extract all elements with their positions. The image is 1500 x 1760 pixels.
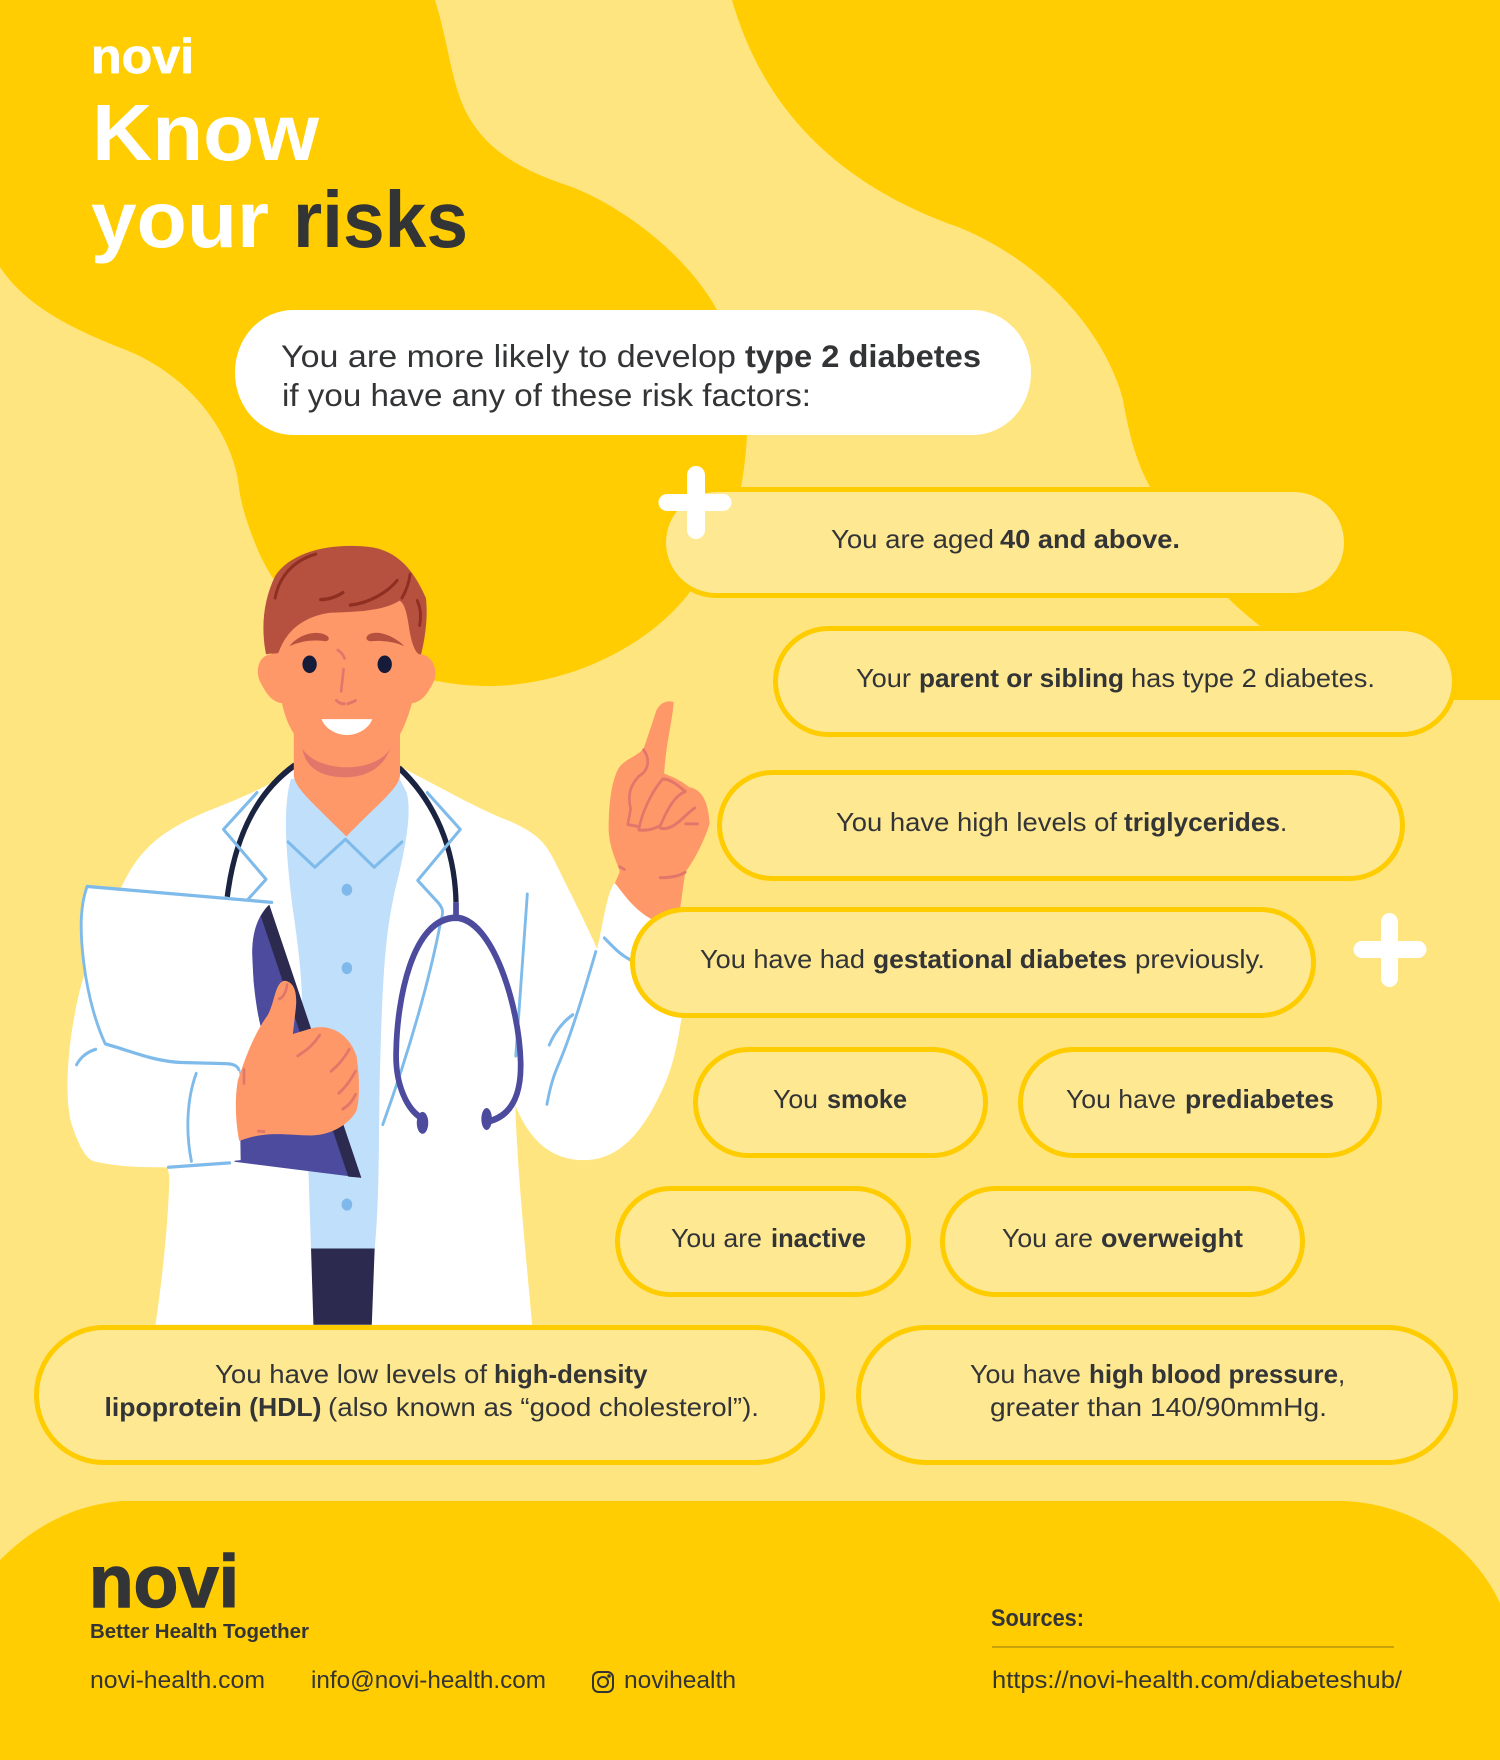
clipboard folder <box>81 886 361 1178</box>
risk pill: HDL: (also known as “good cholesterol”). <box>328 1392 759 1422</box>
background blob: top left <box>0 0 747 686</box>
risk pill: triglycerides: You have high levels of <box>836 807 1118 837</box>
risk pill: family: has type 2 diabetes. <box>1131 663 1375 693</box>
risk pill: HDL: high-density <box>494 1359 648 1389</box>
title <box>91 88 468 264</box>
coat lapels and seams <box>77 793 631 1124</box>
risk pill: prediabetes: You have <box>1066 1084 1176 1114</box>
risk pill: age: You are aged <box>831 524 994 554</box>
risk pill: family: Your <box>856 663 911 693</box>
intro callout: You are more likely to develop <box>281 338 736 374</box>
risk pill: smoke: You <box>773 1084 818 1114</box>
title: Know <box>92 88 320 177</box>
sources link: https://novi-health.com/diabeteshub/ <box>992 1667 1402 1694</box>
risk pill: triglycerides: triglycerides <box>1124 807 1280 837</box>
risk pill: overweight <box>942 1188 1302 1294</box>
background blob: top right <box>732 0 1500 700</box>
risk pill: gestational diabetes: You have had <box>700 944 865 974</box>
icon: plus right <box>1354 913 1426 987</box>
risk pill: HDL: lipoprotein (HDL) <box>104 1392 322 1422</box>
risk pill: family <box>776 628 1454 734</box>
risk pill: family: parent or sibling <box>919 663 1124 693</box>
icon: instagram <box>593 1672 613 1692</box>
footer logo <box>89 1540 309 1643</box>
illustration: doctor <box>68 546 710 1325</box>
logo: novi white: novi <box>91 30 194 84</box>
head <box>258 546 435 777</box>
risk pill: prediabetes: prediabetes <box>1185 1084 1334 1114</box>
doctor coat <box>68 766 684 1325</box>
footer panel background <box>0 1501 1500 1760</box>
title: your <box>91 175 269 264</box>
neck <box>294 721 400 837</box>
shirt buttons <box>342 884 352 1211</box>
intro callout: type 2 diabetes <box>745 338 981 374</box>
risk pill: prediabetes <box>1020 1050 1380 1156</box>
risk pill: blood pressure: , <box>1338 1359 1345 1389</box>
risk pill: blood pressure: high blood pressure <box>1089 1359 1338 1389</box>
risk pill: inactive: inactive <box>771 1223 866 1253</box>
left sleeve cuff <box>167 1064 241 1167</box>
risk pill: HDL: You have low levels of <box>215 1359 488 1389</box>
stethoscope tubes <box>227 765 456 902</box>
risk pill: overweight: overweight <box>1101 1223 1243 1253</box>
right hand pointing <box>609 701 710 919</box>
doctor trousers <box>311 1248 375 1325</box>
contact: website: novi-health.com <box>90 1667 265 1694</box>
sources heading: Sources: <box>991 1605 1084 1632</box>
footer logo: novi <box>89 1540 239 1623</box>
title: risks <box>293 175 468 264</box>
doctor shirt <box>286 779 409 1249</box>
risk pill: HDL <box>36 1328 822 1462</box>
contact: email: info@novi-health.com <box>311 1667 546 1694</box>
risk pill: age: 40 and above. <box>1000 524 1180 554</box>
risk pill: gestational diabetes: gestational diabetes <box>873 944 1127 974</box>
risk pill: smoke <box>696 1050 986 1156</box>
risk pill: blood pressure: greater than 140/90mmHg. <box>990 1392 1327 1422</box>
icon: plus top <box>658 466 732 539</box>
risk pill: inactive <box>618 1188 908 1294</box>
risk pill: gestational diabetes: previously. <box>1135 944 1265 974</box>
risk pill: blood pressure <box>858 1328 1456 1462</box>
contact: instagram handle: novihealth <box>624 1667 736 1694</box>
intro callout: if you have any of these risk factors: <box>282 377 811 413</box>
intro callout <box>235 310 1031 435</box>
risk pill: gestational diabetes <box>632 910 1314 1016</box>
risk pill: blood pressure: You have <box>970 1359 1081 1389</box>
left hand thumbs up <box>236 981 359 1141</box>
footer logo: Better Health Together <box>90 1621 309 1643</box>
risk pill: overweight: You are <box>1002 1223 1093 1253</box>
risk pill: age <box>664 490 1346 596</box>
risk pill: triglycerides: . <box>1280 807 1287 837</box>
risk pill: smoke: smoke <box>827 1084 907 1114</box>
risk pill: triglycerides <box>720 772 1402 878</box>
stethoscope loop <box>396 902 521 1134</box>
risk pill: inactive: You are <box>671 1223 762 1253</box>
